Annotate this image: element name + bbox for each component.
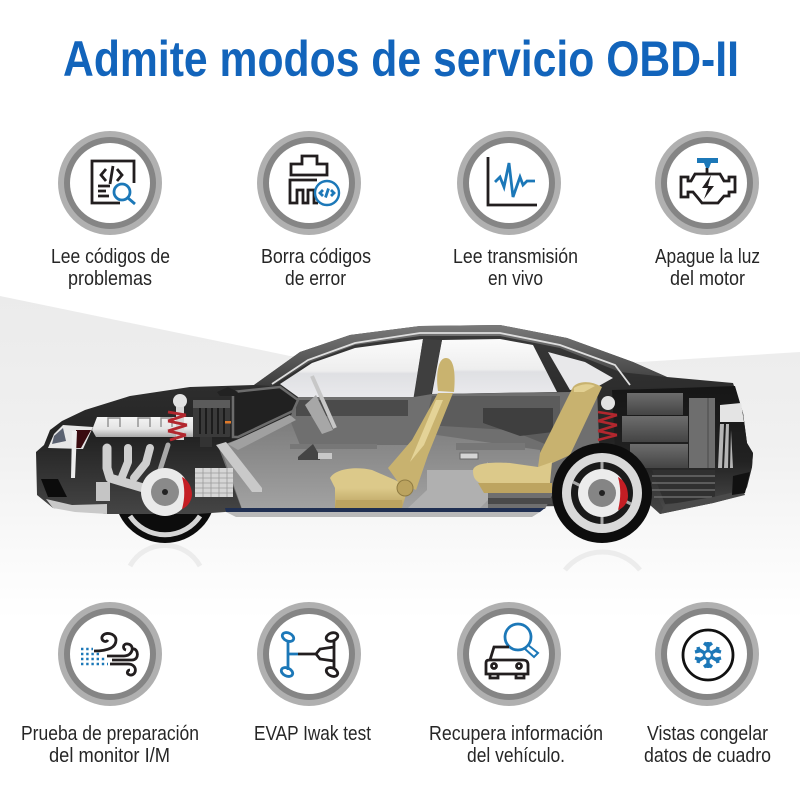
cabin interior — [218, 387, 600, 510]
rear trunk blocks — [612, 386, 753, 512]
label — [655, 246, 760, 290]
icon: check engine — [681, 158, 735, 203]
rear seat — [473, 382, 602, 493]
door handle — [460, 453, 478, 459]
label — [51, 246, 170, 290]
panel: EVAP — [254, 602, 371, 745]
ring — [58, 602, 162, 706]
label — [261, 246, 371, 290]
front wheel — [114, 441, 216, 543]
headlight — [48, 425, 93, 478]
front brake disc — [141, 468, 192, 516]
valve cover — [92, 417, 193, 437]
icon: snowflake — [683, 630, 733, 680]
taillight — [718, 403, 744, 468]
label: problemas — [68, 268, 152, 290]
car body — [36, 325, 753, 514]
label: del motor — [670, 268, 745, 290]
rear suspension spring — [598, 396, 617, 440]
rear wheel — [552, 443, 652, 543]
front suspension spring — [168, 394, 187, 440]
door recess — [483, 408, 553, 436]
ring — [257, 602, 361, 706]
panel: prueba de preparación — [21, 602, 199, 767]
B pillar — [408, 339, 442, 432]
icon: car with magnifier — [486, 624, 538, 678]
label — [453, 246, 578, 290]
label: de error — [285, 268, 346, 290]
front seat — [330, 358, 455, 508]
icon: connector with code badge — [290, 156, 339, 205]
radiator — [195, 468, 233, 497]
door lower panel — [220, 420, 540, 509]
ring — [655, 131, 759, 235]
ring — [457, 131, 561, 235]
window: rear quarter — [548, 352, 613, 390]
icon: code document with magnifier — [92, 161, 135, 204]
label: Vistas congelar — [647, 723, 768, 745]
panel: lee transmisión en vivo — [453, 131, 578, 290]
window: front — [280, 339, 423, 397]
panel: apague la luz del motor — [655, 131, 760, 290]
label — [21, 723, 199, 767]
exhaust manifold — [107, 445, 168, 490]
label: Recupera información — [429, 723, 603, 745]
steering wheel and shifter — [298, 376, 335, 460]
reflection of the car — [130, 545, 640, 570]
rear notch — [732, 472, 750, 495]
label — [429, 723, 603, 767]
label: del vehículo. — [467, 745, 565, 767]
window: middle — [432, 339, 557, 394]
label: en vivo — [488, 268, 543, 290]
ring — [58, 131, 162, 235]
roof chrome strip — [272, 333, 630, 385]
panel: vistas congelar — [644, 602, 771, 767]
air filter box — [193, 387, 238, 447]
bumper lip — [46, 499, 107, 514]
label — [644, 723, 771, 767]
icon: live signal chart — [488, 157, 537, 205]
label: Apague la luz — [655, 246, 760, 268]
illustration: car cutaway — [36, 325, 753, 543]
icon: axle — [280, 631, 339, 678]
label: Prueba de preparación — [21, 723, 199, 745]
manifold base — [96, 482, 110, 501]
label: datos de cuadro — [644, 745, 771, 767]
ring — [257, 131, 361, 235]
armrest — [290, 443, 525, 450]
ring — [457, 602, 561, 706]
rear under floor — [488, 498, 552, 504]
upper door band — [296, 400, 408, 416]
label: EVAP Iwak test — [254, 723, 371, 745]
sill with blue stripe — [225, 508, 545, 517]
panel: recupera información — [429, 602, 603, 767]
front grille — [41, 479, 67, 497]
label: del monitor I/M — [49, 745, 170, 767]
label: Borra códigos — [261, 246, 371, 268]
label: Lee transmisión — [453, 246, 578, 268]
dash lever — [216, 442, 262, 492]
icon: air flow — [81, 633, 137, 675]
label: Lee códigos de — [51, 246, 170, 268]
panel: borra códigos de error — [257, 131, 371, 290]
rear bumper — [660, 490, 745, 514]
panel: lee códigos de problemas — [51, 131, 170, 290]
ring — [655, 602, 759, 706]
firewall dark panel — [233, 387, 298, 437]
roof highlight — [254, 325, 667, 386]
